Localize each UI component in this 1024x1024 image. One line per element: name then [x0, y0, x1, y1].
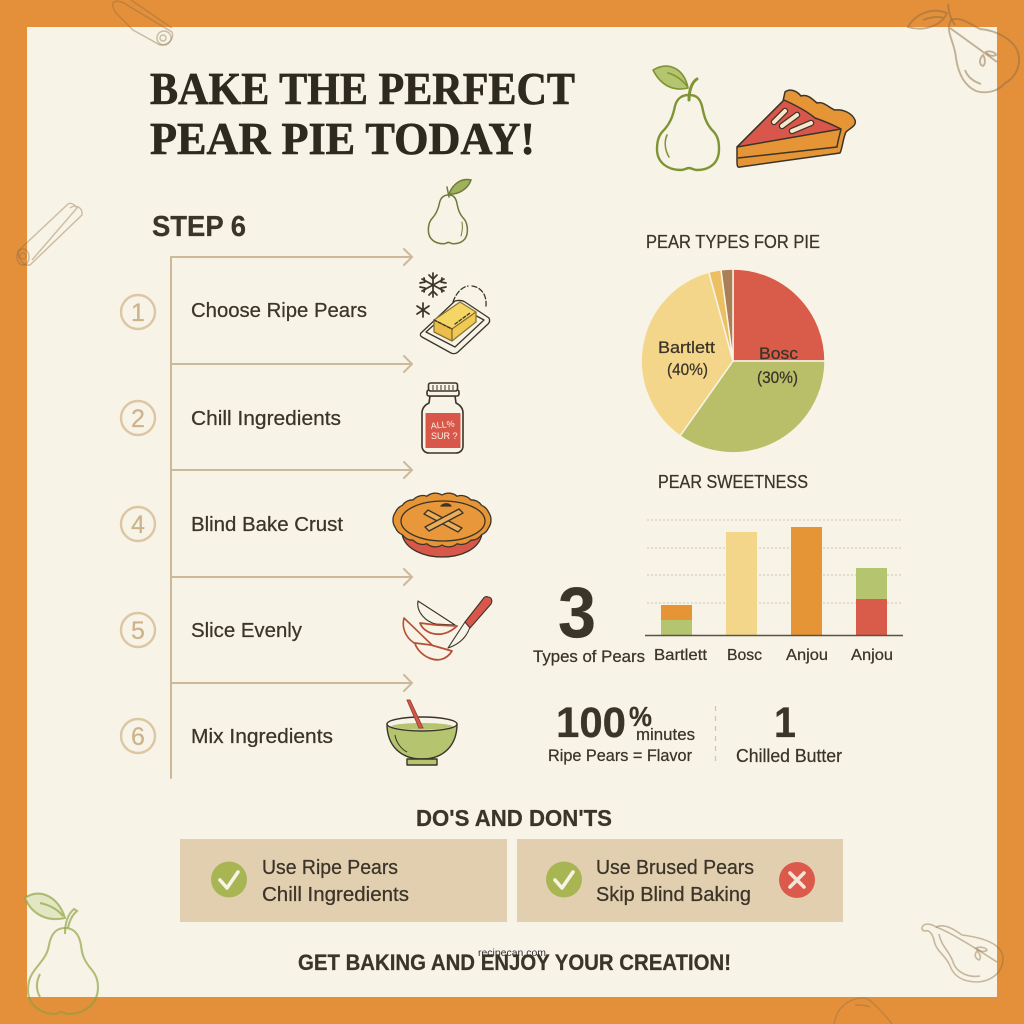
step: slice evenly: Slice Evenly [191, 620, 302, 642]
bar chart: pear sweetness [645, 472, 903, 664]
pie slices [641, 269, 825, 453]
stat: 100% ripe pears [548, 699, 695, 765]
step: mix ingredients [121, 719, 333, 753]
watermark: recipecan.com [478, 947, 546, 959]
step: mix ingredients: 6 [131, 723, 145, 751]
step: chill ingredients: 2 [131, 405, 145, 433]
icon: jar [422, 383, 463, 453]
step: blind bake crust: Blind Bake Crust [191, 514, 343, 536]
step: mix ingredients: Mix Ingredients [191, 726, 333, 748]
step: blind bake crust: 4 [131, 511, 145, 539]
panel: do's: Chill Ingredients [262, 884, 409, 906]
bar labels: Bosc [727, 647, 762, 664]
bar labels: Anjou [786, 647, 828, 664]
bar labels: Anjou [851, 647, 893, 664]
pie labels: (40%) [667, 360, 708, 379]
stat: 1 chilled butter: Chilled Butter [736, 746, 842, 766]
pie heading: PEAR TYPES FOR PIE [646, 232, 820, 252]
panel: don'ts: Use Brused Pears [596, 857, 754, 879]
closing call to action: GET BAKING AND ENJOY YOUR CREATION! [298, 950, 731, 975]
title: BAKE THE PERFECT [150, 63, 575, 114]
step: choose ripe pears: Choose Ripe Pears [191, 300, 367, 322]
pie labels [658, 338, 799, 387]
step: chill ingredients: Chill Ingredients [191, 408, 341, 430]
title: PEAR PIE TODAY! [150, 113, 535, 164]
title [150, 63, 575, 164]
icon: jar: SUR ? [431, 431, 458, 441]
icon: cross [779, 862, 815, 898]
panel: don'ts [517, 839, 843, 922]
timeline with arrows [171, 249, 412, 778]
stat: 100% ripe pears: minutes [636, 725, 695, 744]
panel: don'ts: Skip Blind Baking [596, 884, 751, 906]
icon: sliced pear and knife [403, 597, 492, 660]
decoration: pear bottom right [922, 924, 1003, 982]
icon: pie slice [737, 90, 855, 167]
bars [661, 527, 887, 635]
stat: 100% ripe pears: % [629, 701, 652, 732]
stat: 100% ripe pears: Ripe Pears = Flavor [548, 746, 692, 765]
icon: small pear [428, 180, 471, 244]
panel: do's: Use Ripe Pears [262, 857, 398, 879]
step: slice evenly: 5 [131, 617, 145, 645]
pie labels: Bosc [759, 344, 799, 363]
decoration: pear bottom left [25, 894, 98, 1014]
bar chart heading: PEAR SWEETNESS [658, 472, 808, 492]
step: slice evenly [121, 613, 302, 647]
step: blind bake crust [121, 507, 343, 541]
decoration: pear top right [908, 4, 1019, 92]
stat: 3 types of pears [533, 574, 645, 666]
stat: 1 chilled butter: 1 [774, 699, 796, 747]
heading: do's and don'ts: DO'S AND DON'TS [416, 805, 612, 831]
stat: 3 types of pears: 3 [558, 574, 596, 653]
icon: large pear [653, 66, 719, 170]
icon: check [546, 862, 582, 898]
step: choose ripe pears: 1 [131, 299, 145, 327]
pie labels: (30%) [757, 368, 798, 387]
icon: jar: ALL% [430, 419, 455, 431]
pie chart: pear types [641, 232, 825, 453]
icon: whole pie [393, 493, 491, 557]
icon: mixing bowl [387, 700, 457, 765]
icon: butter and snowflakes [417, 273, 490, 354]
heading: step 6: STEP 6 [152, 211, 246, 243]
stat: 1 chilled butter [736, 699, 842, 766]
stat: 100% ripe pears: 100 [556, 699, 626, 747]
decoration: cinnamon stick left [17, 203, 82, 265]
step: chill ingredients [121, 401, 341, 435]
bar labels [654, 647, 893, 664]
decoration: pear bottom edge [834, 998, 892, 1024]
icon: check [211, 862, 247, 898]
bar labels: Bartlett [654, 647, 708, 664]
decoration: cinnamon stick top left [113, 0, 172, 45]
step: choose ripe pears [121, 295, 367, 329]
stat: 3 types of pears: Types of Pears [533, 647, 645, 666]
pie labels: Bartlett [658, 338, 715, 357]
panel: do's [180, 839, 507, 922]
